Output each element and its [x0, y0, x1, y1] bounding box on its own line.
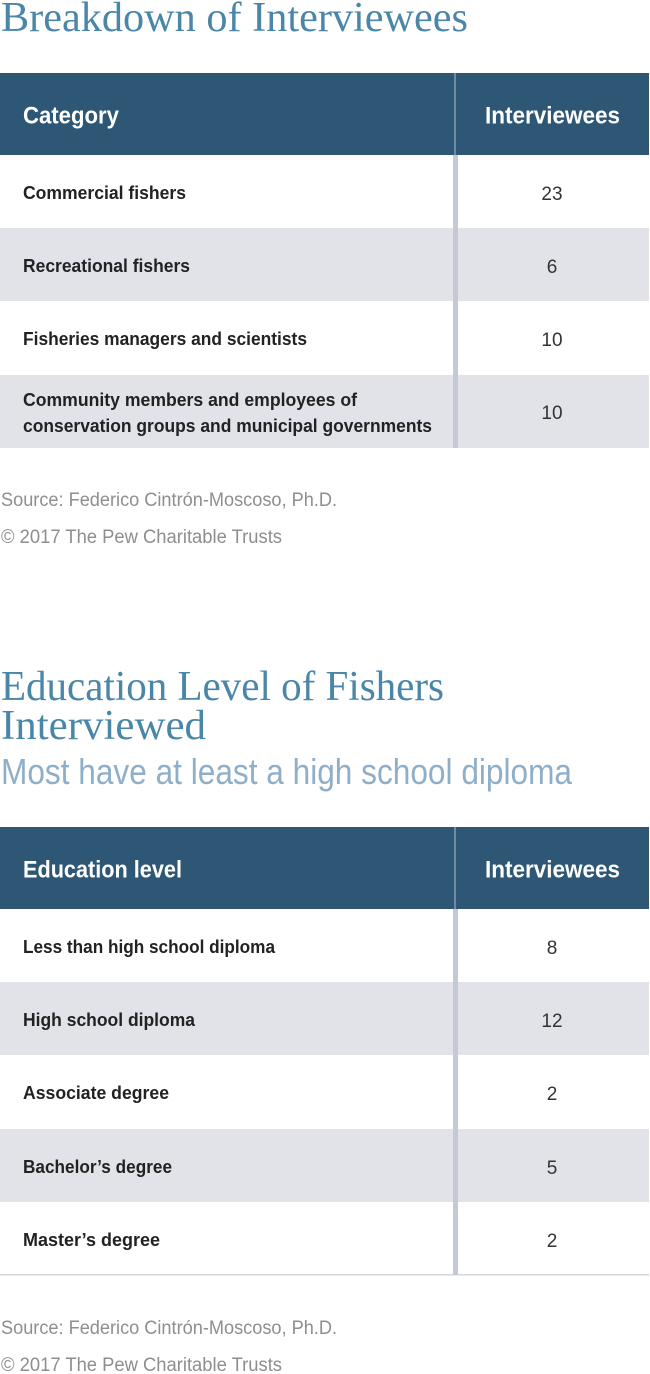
row: community members: conservation groups and municipal governments: [23, 415, 432, 436]
row: bachelor's degree: 5: [547, 1158, 557, 1179]
row: bachelor's degree: Bachelor’s degree: [23, 1156, 172, 1177]
row: bachelor's degree: [0, 1129, 649, 1202]
row: master's degree: [0, 1202, 649, 1275]
table header row: [0, 73, 649, 155]
source note: Source: Federico Cintrón-Moscoso, Ph.D.: [1, 490, 337, 511]
table header row: [0, 827, 649, 909]
table header row: Interviewees: [485, 856, 620, 884]
row: less than high school diploma: [0, 909, 649, 982]
row: associate degree: [0, 1055, 649, 1129]
row: fisheries managers and scientists: Fisheries managers and scientists: [23, 328, 307, 349]
title: Education Level of Fishers Interviewed: [1, 664, 444, 749]
row: associate degree: 2: [547, 1084, 557, 1105]
row: master's degree: Master’s degree: [23, 1229, 160, 1250]
column divider: [453, 909, 458, 1275]
table header row: Category: [23, 102, 120, 130]
row: high school diploma: High school diploma: [23, 1009, 196, 1030]
row: less than high school diploma: Less than high school diploma: [23, 936, 276, 957]
row: high school diploma: 12: [541, 1011, 563, 1032]
row: recreational fishers: Recreational fishers: [23, 255, 190, 276]
row: commercial fishers: [0, 155, 649, 228]
table header row: Education level: [23, 856, 182, 884]
row: recreational fishers: 6: [547, 257, 557, 278]
row: commercial fishers: Commercial fishers: [23, 182, 186, 203]
table: breakdown of interviewees: [0, 73, 649, 448]
row: recreational fishers: [0, 228, 649, 301]
row: master's degree: 2: [547, 1231, 557, 1252]
row: community members: 10: [541, 403, 563, 424]
copyright note: © 2017 The Pew Charitable Trusts: [1, 527, 282, 548]
column divider: [453, 155, 458, 448]
row: commercial fishers: 23: [541, 184, 563, 205]
source note: Source: Federico Cintrón-Moscoso, Ph.D.: [1, 1318, 337, 1339]
row: associate degree: Associate degree: [23, 1082, 169, 1103]
row: high school diploma: [0, 982, 649, 1055]
title: Education Level of Fishers Interviewed: Interviewed: [1, 703, 206, 749]
table: education level: [0, 827, 649, 1276]
row: fisheries managers and scientists: 10: [541, 330, 563, 351]
table header row: Interviewees: [485, 102, 620, 130]
row: community members: [0, 375, 649, 448]
row: fisheries managers and scientists: [0, 301, 649, 375]
row: community members: Community members and employees of: [23, 389, 358, 410]
subtitle: Most have at least a high school diploma: [1, 751, 573, 792]
title: Education Level of Fishers Interviewed: Education Level of Fishers: [1, 664, 444, 710]
row: less than high school diploma: 8: [547, 938, 557, 959]
